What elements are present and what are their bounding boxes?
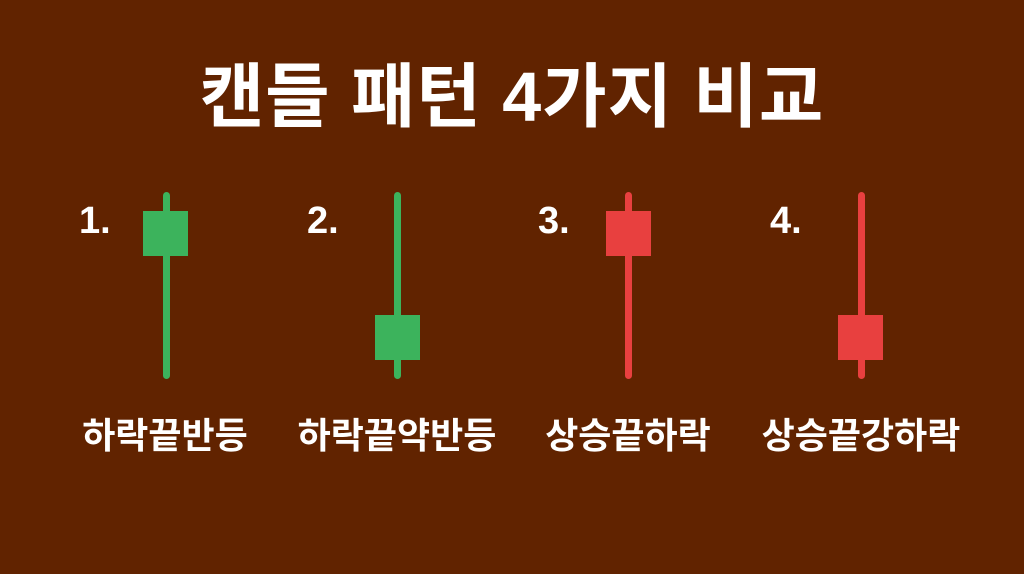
body 2 [375,315,420,360]
number 1: 1. [79,200,111,242]
body 4 [838,315,883,360]
number 3: 3. [538,200,570,242]
body 1 [143,211,188,256]
wick 3 [625,192,632,379]
label 2: 하락끝약반등 [298,415,496,456]
wick 4 [858,192,865,379]
number 4: 4. [770,200,802,242]
number 2: 2. [307,200,339,242]
title: 캔들 패턴 4가지 비교 [200,58,824,136]
body 3 [606,211,651,256]
label 4: 상승끝강하락 [762,415,960,456]
label 3: 상승끝하락 [545,415,711,456]
wick 1 [163,192,170,379]
wick 2 [394,192,401,379]
label 1: 하락끝반등 [82,415,248,456]
